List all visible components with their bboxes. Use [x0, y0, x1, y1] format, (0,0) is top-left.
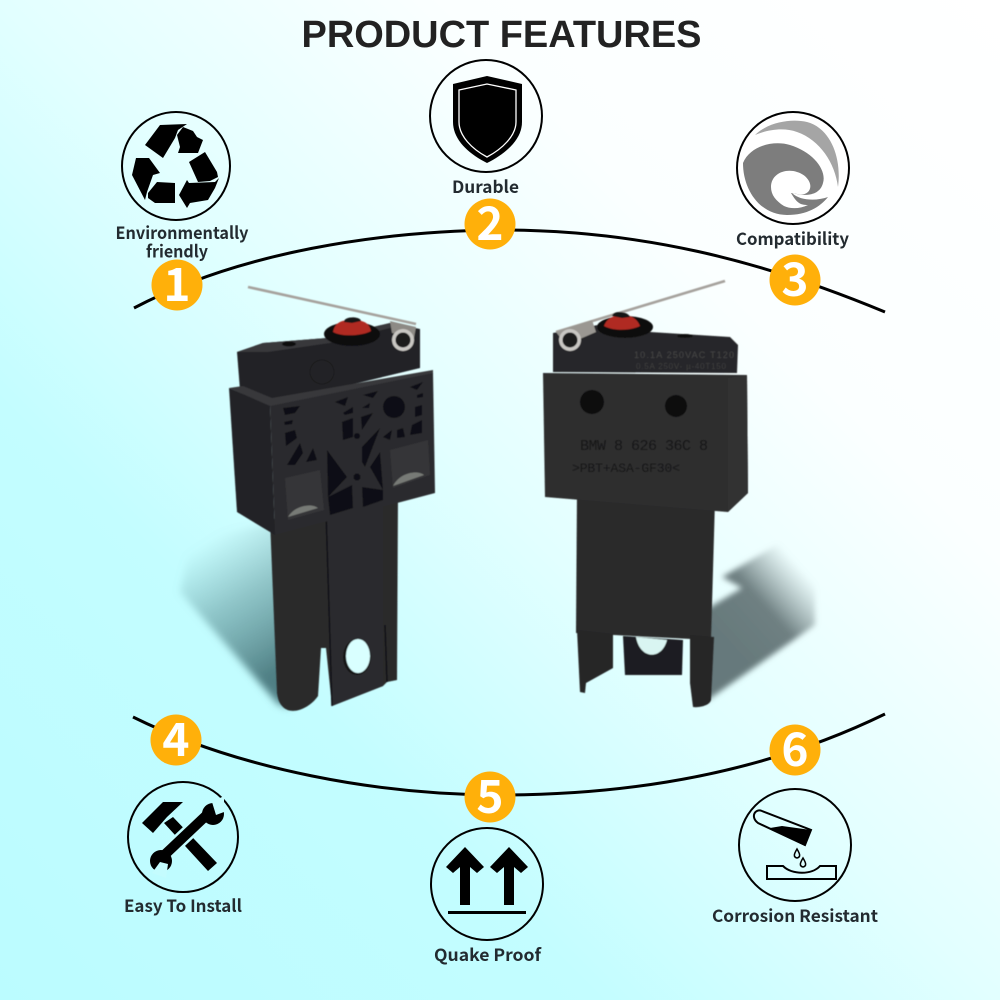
label: Easy To Install: [124, 892, 242, 917]
label: Durable: [452, 173, 519, 198]
mounting block: [543, 373, 748, 512]
label line 2: friendly: [146, 238, 208, 262]
feature 6: corrosion resistant: [712, 714, 878, 927]
block dimples: [285, 470, 324, 520]
badge 1: 1: [163, 249, 191, 315]
feature 2: durable: [430, 60, 542, 254]
icon: tools: [128, 782, 238, 892]
badge 4: [150, 704, 202, 770]
roller: [556, 320, 596, 345]
switch body top: [237, 323, 420, 405]
badge 6: 6: [781, 714, 809, 780]
switch body top: [553, 325, 738, 373]
badge 6: [770, 714, 820, 780]
badge 1: [152, 249, 202, 315]
feature 5: quake proof: [431, 761, 543, 966]
feature 4: easy to install: [124, 704, 242, 917]
lever: [556, 281, 725, 332]
shaft: [576, 490, 715, 640]
badge 2: [464, 188, 516, 254]
icon: up arrows: [431, 828, 543, 940]
label: Quake Proof: [434, 941, 542, 966]
badge 3: 3: [781, 244, 809, 310]
product: right switch: >PBT+ASA-GF30<: [572, 461, 680, 476]
lever: [248, 287, 416, 324]
top arc line: [134, 230, 885, 312]
title: PRODUCT FEATURES: [302, 14, 702, 56]
badge 4: 4: [162, 704, 190, 770]
badge 5: 5: [476, 761, 504, 827]
badge 5: [464, 761, 516, 827]
product shadow: right: [705, 535, 815, 702]
product: right switch: 0.5A 250V- µ-40T150: [636, 362, 727, 371]
badge 3: [770, 244, 820, 310]
icon: shield: [430, 60, 542, 172]
push button: [324, 322, 380, 346]
shaft legs: [577, 630, 613, 693]
rating markings: 10.1A 250VAC T120: [634, 350, 734, 360]
push button: [597, 316, 653, 338]
icon: recycle: [122, 112, 230, 220]
bottom arc line: [133, 714, 885, 795]
mounting block side: [229, 388, 275, 535]
roller: [390, 321, 416, 338]
product: left switch: [229, 287, 435, 711]
feature 3: compatibility: [736, 112, 849, 310]
product: right switch: [543, 281, 748, 707]
block markings: BMW 8 626 36C 8: [580, 438, 708, 455]
shaft: [270, 490, 398, 711]
icon: swirl: [737, 112, 849, 224]
shaft hole: [343, 639, 371, 675]
feature 1: environmentally friendly: [116, 112, 249, 315]
label: Compatibility: [736, 225, 849, 250]
shaft tab: [623, 636, 683, 675]
block cutouts: [283, 382, 423, 515]
product shadow: left: [180, 520, 290, 708]
badge 2: 2: [476, 188, 504, 254]
label: Environmentally: [116, 219, 249, 244]
mounting block front: [270, 372, 435, 535]
label: Corrosion Resistant: [712, 902, 878, 927]
icon: corrosion: [739, 789, 851, 901]
